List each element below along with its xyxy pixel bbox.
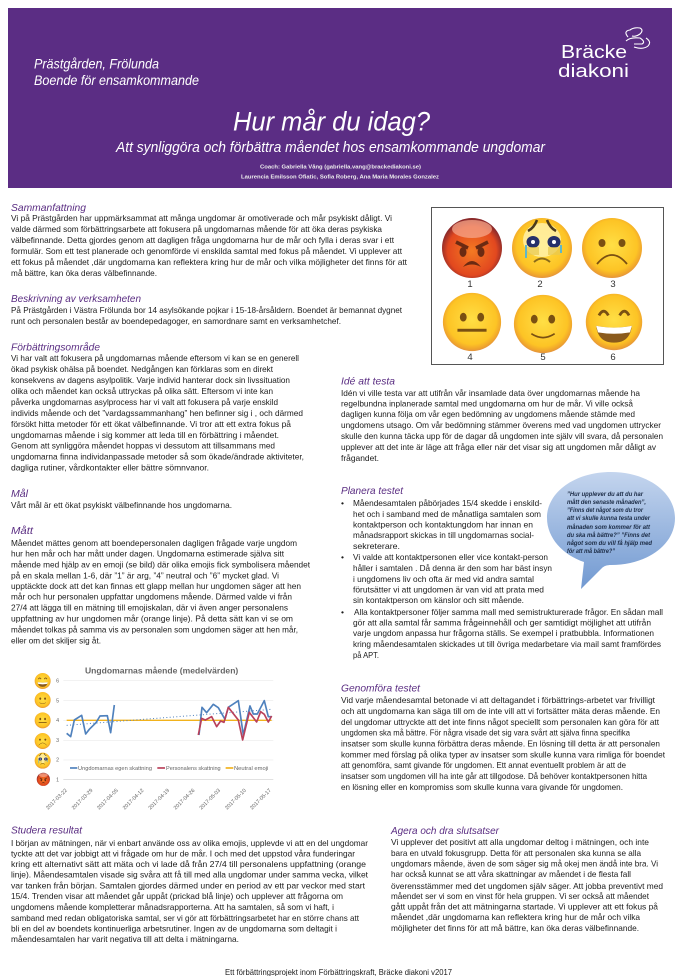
body text: Vi upplever det positivt att alla ungdomar deltog i mätningen, och inte [391,837,649,847]
body text: kommer med förslag på olika typer av insatser som skulle kunna vara rimliga för boendet [341,750,666,760]
body text: tyckte att det var jobbigt att vi frågade om hur de mår. I och med det uppstod våra funderingar [11,848,355,858]
heading: Studera resultat [11,824,83,836]
body text: upplever att det inte är läge att fråga eller när det visar sig att ungdomen mår dåligt av [341,442,657,452]
body text: olika och måendet kan också uttryckas på olika sätt. Eftersom vi inte kan [11,386,273,396]
body text: del ungdomar uttryckte att det inte finns något speciellt som personalen kan göra för att [341,717,660,727]
subtitle: Att synliggöra och förbättra måendet hos ensamkommande ungdomar [115,139,546,156]
body text: hur hen mår och har mått under dagen. Ungdomarna estimerade själva sitt [11,548,285,558]
bullet list: kontaktperson och kontaktungdom har innan en [353,520,533,530]
body text: måendesamtalen har varit negativa till att delta i mätningarna. [11,934,239,944]
body text: överensstämmer med det ungdomen själv säger. Att jobba preventivt med [391,881,663,891]
x axis date labels: 2017-04-26 [173,788,196,811]
heading: Beskrivning av verksamheten [11,293,141,305]
heading: Sammanfattning [11,202,86,214]
x axis date labels: 2017-05-17 [249,788,273,811]
body text: formulär. Som ett test planerade och genomförde vi enskilda samtal med fokus på måendet. Vi upplever att [11,246,403,256]
y axis labels [56,679,59,783]
body text [11,213,408,278]
body text: ungdomarna finna individanpassade metoder så som ökade/ändrade aktiviteter, [11,452,304,462]
panel: Sammanfattning [11,202,408,278]
organisation name [34,56,199,88]
body text: ungdomens utsago. Om vår bedömning stämmer överens med vad ungdomen uttrycker [341,420,661,430]
emoji 6 laughing: 6 [610,352,616,363]
bullet list: kring måendesamtalen skickades ut till övriga medarbetare via mail samt framfördes [353,639,661,649]
panel: Planera testet [341,485,663,660]
bullet list: förutsätter vi att ungdomen är van vid att prata med [353,584,544,594]
logo: Bräcke diakoni [558,28,650,81]
legend: Ungdomarnas egen skattning [78,766,152,772]
body text: kring ett alternativt sätt att mäta och vi lade då från 27/4 till personalens uppfattning (orange [11,859,366,869]
x axis date labels [45,788,273,811]
bullet list: sin kontaktperson om känslor och sitt mående. [353,595,524,605]
body text: må bättre, kan öka deras välbefinnande. [11,268,157,278]
body text: Vid varje måendesamtal betonade vi att deltagandet i förbättrings-arbetet var frivilligt [341,695,656,705]
bubble text: månaden som kommer för att [567,523,651,531]
credits: Coach: Gabriella Vång (gabriella.vang@brackediakoni.se) [260,164,421,170]
logo: Bräcke diakoni: diakoni [558,61,629,81]
credits [241,164,439,180]
body text: Måendet mättes genom att boendepersonalen dagligen frågade varje ungdom [11,538,297,548]
emoji 1 angry: 1 [467,279,473,290]
body text: gått uppåt från det att mätningarna startade. Vi upplever att ett fokus på [391,902,658,912]
emoji 2 crying [512,218,572,290]
y axis labels: 2 [56,758,59,764]
body text: samband med redan obligatoriska samtal, ser vi gör att förbättringsarbetet har en större chans att [11,913,360,923]
x axis date labels: 2017-04-05 [96,788,120,811]
body text: insatser som skulle kunna förbättra deras mående. En lösning till detta är att personalen [341,738,660,748]
bubble text: något som du vill få hjälp med [567,539,652,547]
bullet list [341,498,663,660]
bullet list: • [341,552,344,562]
chart title: Ungdomarnas mående (medelvärden) [85,666,238,676]
emoji 4 neutral [443,293,501,363]
body text: Idén vi ville testa var att utifrån vår insamlade data över ungdomarnas mående ha [341,388,640,398]
bullet list: • [341,498,344,508]
x axis date labels: 2017-05-03 [199,788,222,811]
body text: mående med hjälp av en emoji (se bild) där olika emojis fick symbolisera måendet [11,560,311,570]
bubble text: för att må bättre?” [567,547,616,555]
bullet list: på APT. [353,650,379,660]
heading: Mått [11,525,34,537]
panel: Agera och dra slutsatser [390,825,663,933]
body text: Vårt mål är ett ökat psykiskt välbefinnande hos ungdomarna. [11,500,232,510]
body text: regelbundna inplanerade samtal med ungdomarna om hur de mår. Vi ville också [341,398,633,408]
heading: Genomföra testet [341,682,421,694]
emoji 3 sad: 3 [610,279,616,290]
body text: på en skala mellan 1-6, där ”1” är arg, ”4” neutral och ”6” mycket glad. Vi [11,570,279,580]
heading: Mål [11,488,29,500]
body text: eller om det skiljer sig åt. [11,636,101,646]
x axis date labels: 2017-05-10 [224,788,248,811]
body text: dagligen kunna följa om vår egen bedömning av ungdomens mående stämde med [341,409,635,419]
y axis labels: 4 [56,718,59,724]
body text: ungdomens mående kompletterar månadsrapporterna. Att ha samtalen, så som vi haft, i [11,902,334,912]
bubble text: ”Finns det något som du tror [567,506,643,514]
body text: valde därmed som förbättringsarbete att fokusera på ungdomarnas mående för att öka deras psykiska [11,224,382,234]
body text: en lösning eller en kompromiss som skulle kunna vara givande för ungdomen. [341,782,623,792]
body text: ungdomarnas mående i sig kommer att leda till en förbättring i måendet. [11,430,279,440]
bullet list: i ungdomens liv och ofta är med vid andra samtal [353,574,534,584]
body text: påverka ungdomarnas asylprocess har vi valt att fokusera på varje enskild [11,397,278,407]
emoji 6 laughing [586,294,642,363]
bullet list: håller i samtalen . Då denna är den som har bäst insyn [353,563,552,573]
body text: mår och hur personalen uppfattar ungdomens mående. Därmed valde vi från [11,592,292,602]
body text: har också kunnat se att våra skattningar av måendet i de flesta fall [391,869,631,879]
body text: och att ungdomarna kan säga till om de inte vill att vi fortsätter mäta deras mående. En [341,706,660,716]
credits: Laurencia Emilsson Ofiatic, Sofia Roberg, Ana Maria Morales Gonzalez [241,174,439,180]
bubble text: att vi skulle kunna testa under [567,515,651,522]
body text: måendet ser vi som en vinst för hela gruppen. Vi ser också att måendet [391,891,650,901]
body text [341,388,663,463]
neutral emoji line [67,718,272,722]
body text: måendet tolkas på samma vis av personalen som ungdomen säger att hen mår, [11,624,298,634]
body text: Vi har valt att fokusera på ungdomarnas mående eftersom vi kan se en generell [11,353,299,363]
body text: ungdomen ska må bättre. För några visade det sig vara svårt att själva finna specifika [341,728,630,738]
y axis labels: 3 [56,738,59,744]
body text: ungdomars mående, även de som säger sig må okej men ändå inte bra. Vi [391,858,658,868]
body text: konsekvens av dagens asylpolitik. Varje individ hanterar dock sin livssituation [11,375,290,385]
heading: Idé att testa [341,376,395,388]
y axis labels: 1 [56,777,59,783]
bubble text [567,491,652,555]
body text: bara en utvald fokusgrupp. Detta för att personalen ska kunna se alla [391,848,641,858]
body text: måendet ,där ungdomarna kan reflektera kring hur de mår och vilka [391,912,640,922]
body text: Vi på Prästgården har uppmärksammat att många ungdomar är omotiverade och mår psykiskt dåligt. Vi [11,213,392,223]
organisation name: Prästgården, Frölunda [34,56,159,72]
emoji 5 smile [514,295,572,363]
emoji 3 sad [582,218,642,290]
x axis date labels: 2017-03-22 [45,788,69,811]
body text [11,838,369,944]
body text: att genomföra, samt givande för ungdomen. Ett annat eventuellt problem är att de [341,760,626,770]
panel: Mått [11,525,311,646]
panel: Förbättringsområde [11,342,304,472]
panel: Studera resultat [11,824,369,944]
y axis labels: 6 [56,679,59,685]
series: ungdomarnas egen skattning [67,701,272,737]
line chart: Ungdomarnas mående [35,666,273,811]
series: personalens skattning [198,707,272,740]
bullet list: gör att alla samtal får samma frågeinnehåll och ger samtidigt möjlighet att utifrån [353,618,651,628]
trend line [67,709,272,725]
header banner [8,8,672,188]
legend: Neutral emoji [234,766,268,772]
x axis date labels: 2017-04-12 [122,788,145,811]
callout: speech bubble with example questions [547,472,675,589]
bullet list: sekreterare. [353,541,400,551]
emoji 5 smile: 5 [540,352,546,363]
body text: upptäckte dock att det kan finnas ett glapp mellan hur ungdomen säger att hen [11,581,301,591]
bullet list: • [341,607,344,617]
panel: Genomföra testet [341,682,666,792]
bullet list: månadsrapport skickas in till ungdomarnas social- [353,530,534,540]
emoji 4 neutral: 4 [467,352,473,363]
body text: välbefinnande. Detta gjordes genom att dagligen fråga ungdomarna hur de mår och fylla i deras svar i ett [11,235,395,245]
body text [11,353,304,472]
body text: Genom att synliggöra måendet hoppas vi dessutom att tillsammans med [11,440,275,450]
legend [70,766,268,772]
body text: 15/4. Trenden visar att måendet går uppåt (prickad blå linje) och upplever att frågorna om [11,891,343,901]
body text: I början av mätningen, när vi enbart använde oss av olika emojis, upplevde vi att en del ungdomar [11,838,368,848]
body text: möjligheter det finns för att må bättre, kan öka deras välbefinnande. [391,923,639,933]
panel: Beskrivning av verksamheten [11,293,403,326]
panel: emoji scale image [432,208,664,364]
heading: Agera och dra slutsatser [390,825,499,837]
body text: skulle den kunna täcka upp för de dagar då ungdomen inte själv vill svara, då personalen [341,431,663,441]
y axis labels: 5 [56,698,59,704]
bullet list: Vi valde att kontaktpersonen eller vice kontakt-person [353,552,548,562]
body text: frågandet. [341,453,379,463]
bubble text: du ska må bättre?” ”Finns det [567,531,651,539]
body text: bli en del av boendets kontinuerliga arbetsrutiner. Ingen av de ungdomarna som deltagit i [11,924,337,934]
body text [11,305,403,326]
panel: Idé att testa [341,376,663,463]
bubble text: mått den senaste månaden”, [567,498,646,506]
emoji 1 angry [442,218,502,290]
legend: Personalens skattning [166,766,221,772]
heading: Förbättringsområde [11,342,100,354]
body text: dagliga rutiner, vårdkontakter eller bättre sömnvanor. [11,462,209,472]
body text: var tanken från början. Samtalen gjordes därmed under en period av ett par veckor med start [11,880,366,890]
x axis date labels: 2017-03-29 [71,788,94,811]
body text: försökt hitta metoder för ett ökat välbefinnande. Vi tror att ett extra fokus på [11,419,291,429]
body text [391,837,663,933]
emoji scale [35,673,51,786]
body text: runt och personalen består av boendepedagoger, en samordnare samt en verksamhetchef. [11,316,341,326]
bullet list: varje ungdom anpassa hur frågorna ställs. Se exempel i pratbubbla. Informationen [353,628,654,638]
bullet list: Alla kontaktpersoner följer samma mall med semistrukturerade frågor. En sådan mall [354,607,663,617]
x axis date labels: 2017-04-19 [148,788,171,811]
title: Hur mår du idag? [233,106,430,136]
body text: insatser som ungdomen vill ha inte går att tillgodose. Då behöver kontaktpersonen hitta [341,771,647,781]
heading: Planera testet [341,485,404,497]
bullet list: het och i samband med de månatliga samtalen som [353,509,541,519]
body text: ett fokus på måendet ,där ungdomarna kan reflektera kring hur de mår och vilka möjligheter det finns för att [11,257,408,267]
emoji 2 crying: 2 [537,279,543,290]
body text [341,695,666,792]
body text: På Prästgården i Västra Frölunda bor 14 asylsökande pojkar i 15-18-årsåldern. Boendet är bemannat dygnet [11,305,403,315]
logo: Bräcke diakoni: Bräcke [561,42,627,62]
bullet list: Måendesamtalen påbörjades 15/4 skedde i enskild- [353,498,542,508]
body text [11,538,311,646]
body text: 27/4 att lägga till en mätning till emojiskalan, där vi även anger personalens [11,602,288,612]
organisation name: Boende för ensamkommande [34,72,199,88]
panel: Mål [11,488,232,510]
body text: uppfattning av hur ungdomen mår (orange linje). På detta sätt kan vi se om [11,614,293,624]
body text: ökad psykisk ohälsa på boendet. Nedgången kan förklaras som en direkt [11,364,274,374]
body text: linje). Måendesamtalen visade sig svåra att få till med alla ungdomar under samma vecka, vilket [11,870,369,880]
bubble text: ”Hur upplever du att du har [567,491,644,498]
body text: individs mående och det ”vardagssammanhang” hen befinner sig i , och därmed [11,408,303,418]
